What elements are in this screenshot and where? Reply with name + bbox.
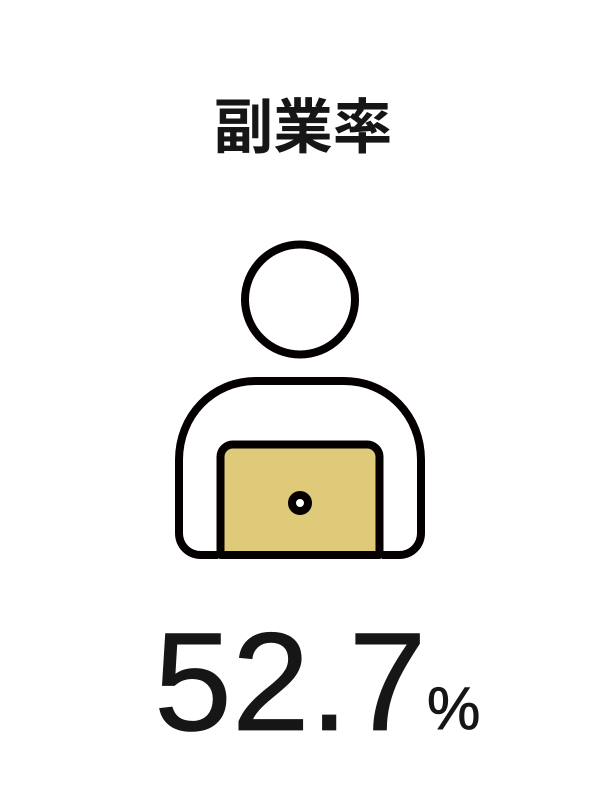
icon: laptop	[220, 444, 380, 555]
title: 副業率	[214, 94, 392, 161]
value: 52.7: 52.7	[154, 603, 426, 760]
icon: head	[245, 244, 355, 354]
icon: body	[179, 381, 421, 555]
unit: percent: %	[427, 675, 480, 742]
